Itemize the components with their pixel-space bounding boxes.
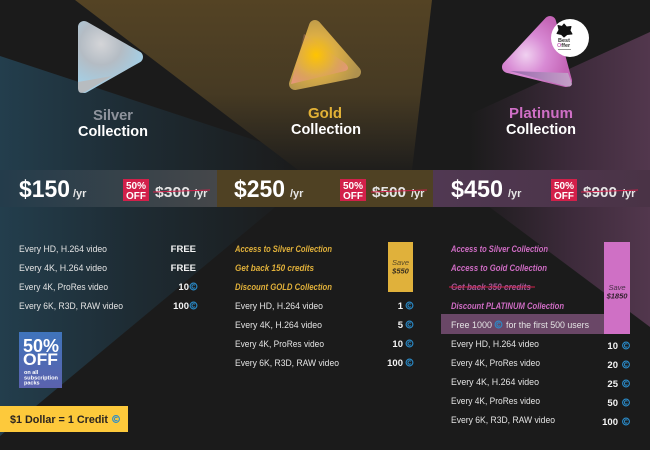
price: gold: $500 [372, 184, 406, 201]
promo: 50% off subscription packs: 50% [23, 336, 59, 356]
price: gold: $250 [234, 176, 285, 203]
icon: silver play triangle [78, 27, 137, 93]
price: platinum: $450 [451, 176, 503, 203]
feature list: gold: Access to Silver Collection [234, 244, 332, 255]
heading: Platinum Collection [506, 105, 576, 138]
feature list: platinum: Get back 350 credits [451, 282, 531, 293]
feature list: gold: 10 [392, 339, 403, 350]
heading: Silver Collection: Silver [93, 107, 133, 124]
price: gold: /yr [290, 188, 304, 200]
highlight row: free credits: Free 1000 [451, 320, 492, 331]
price band: platinum [433, 170, 650, 207]
highlight row: free credits: for the first 500 users [506, 320, 589, 331]
feature list: gold: 5 [398, 320, 404, 331]
feature list: silver: Every 4K, H.264 video [19, 263, 107, 274]
feature list: gold: Every 4K, H.264 video [235, 320, 322, 331]
feature list: platinum: 50 [607, 398, 618, 409]
feature list: silver [19, 244, 197, 312]
feature list: platinum: Every 4K, ProRes video [451, 358, 540, 369]
feature list: gold: Get back 150 credits [235, 263, 314, 274]
icon: gold triangle [291, 26, 355, 84]
feature list: platinum: 10 [607, 341, 618, 352]
promo: 50% off subscription packs: packs [24, 380, 40, 386]
feature list: gold: 1 [398, 301, 404, 312]
feature list: platinum: Every HD, H.264 video [451, 339, 539, 350]
promo: 50% off subscription packs: on all [24, 370, 39, 376]
price: platinum: $900 [583, 184, 617, 201]
feature list: silver: Every 4K, ProRes video [19, 282, 108, 293]
feature list: platinum: 25 [607, 379, 619, 390]
feature list: silver: 100 [173, 301, 189, 312]
price: silver: /yr [73, 188, 87, 200]
price band: silver [0, 170, 217, 207]
save box: platinum: $1850 [606, 292, 628, 300]
heading: Gold Collection [291, 105, 361, 138]
feature list: platinum: Access to Gold Collection [450, 263, 547, 274]
callout: dollar to credit [0, 406, 128, 432]
feature list: platinum: Discount PLATINUM Collection [451, 301, 564, 312]
feature list: gold: Every 4K, ProRes video [235, 339, 324, 350]
save box: gold: $550 [391, 266, 410, 276]
price: platinum: 50% [554, 181, 574, 192]
light beam: platinum [405, 32, 650, 327]
price: platinum: OFF [554, 191, 574, 202]
save box: gold: Save [392, 258, 409, 267]
price: gold: 50% [343, 181, 363, 192]
feature list: silver: FREE [171, 263, 196, 274]
light beam: silver [0, 56, 327, 436]
feature list: silver: Every 6K, R3D, RAW video [19, 301, 123, 312]
feature list: platinum: Every 6K, R3D, RAW video [451, 415, 555, 426]
feature list: platinum: Every 4K, H.264 video [451, 377, 539, 388]
feature list: platinum: Every 4K, ProRes video [451, 396, 540, 407]
promo: 50% off subscription packs: OFF [23, 350, 58, 369]
light beam: gold [75, 0, 432, 170]
price: silver: $150 [19, 176, 70, 203]
feature list: gold: Every HD, H.264 video [235, 301, 323, 312]
heading: Platinum Collection: Collection [506, 121, 576, 138]
promo: 50% off subscription packs [19, 332, 62, 388]
save box: gold [388, 242, 413, 292]
callout: dollar to credit: $1 Dollar = 1 Credit [10, 414, 108, 426]
promo: 50% off subscription packs: subscription [24, 376, 59, 382]
price: platinum: /yr [508, 188, 522, 200]
heading: Gold Collection: Collection [291, 121, 361, 138]
feature list: platinum: 100 [602, 417, 618, 428]
feature list: gold: Discount GOLD Collection [235, 282, 332, 293]
feature list: platinum [449, 244, 629, 428]
price: gold [234, 176, 427, 203]
price: silver: OFF [126, 191, 146, 202]
badge: best offer [551, 19, 589, 57]
price: gold: OFF [343, 191, 363, 202]
highlight row: free credits [441, 314, 604, 334]
price: silver: 50% [126, 181, 146, 192]
badge: best offer: Best [558, 38, 570, 44]
icon: platinum triangle [508, 22, 572, 87]
heading: Gold Collection: Gold [308, 105, 342, 122]
feature list: gold [234, 244, 413, 369]
price band: gold [217, 170, 433, 207]
price: platinum [451, 176, 638, 203]
price: silver: $300 [155, 184, 190, 201]
price: gold: /yr [411, 188, 425, 200]
feature list: platinum: 20 [607, 360, 618, 371]
feature list: silver: Every HD, H.264 video [19, 244, 107, 255]
feature list: silver: FREE [171, 244, 196, 255]
price: silver: /yr [194, 188, 208, 200]
badge: best offer: Offer [557, 43, 571, 49]
save box: platinum: Save [608, 283, 626, 292]
feature list: silver: 10 [178, 282, 189, 293]
heading: Platinum Collection: Platinum [509, 105, 573, 122]
save box: platinum [604, 242, 630, 334]
heading: Silver Collection [78, 107, 148, 140]
feature list: platinum: Access to Silver Collection [450, 244, 548, 255]
feature list: gold: 100 [387, 358, 403, 369]
price: platinum: /yr [622, 188, 636, 200]
price: silver [19, 176, 210, 203]
heading: Silver Collection: Collection [78, 123, 148, 140]
feature list: gold: Every 6K, R3D, RAW video [235, 358, 339, 369]
